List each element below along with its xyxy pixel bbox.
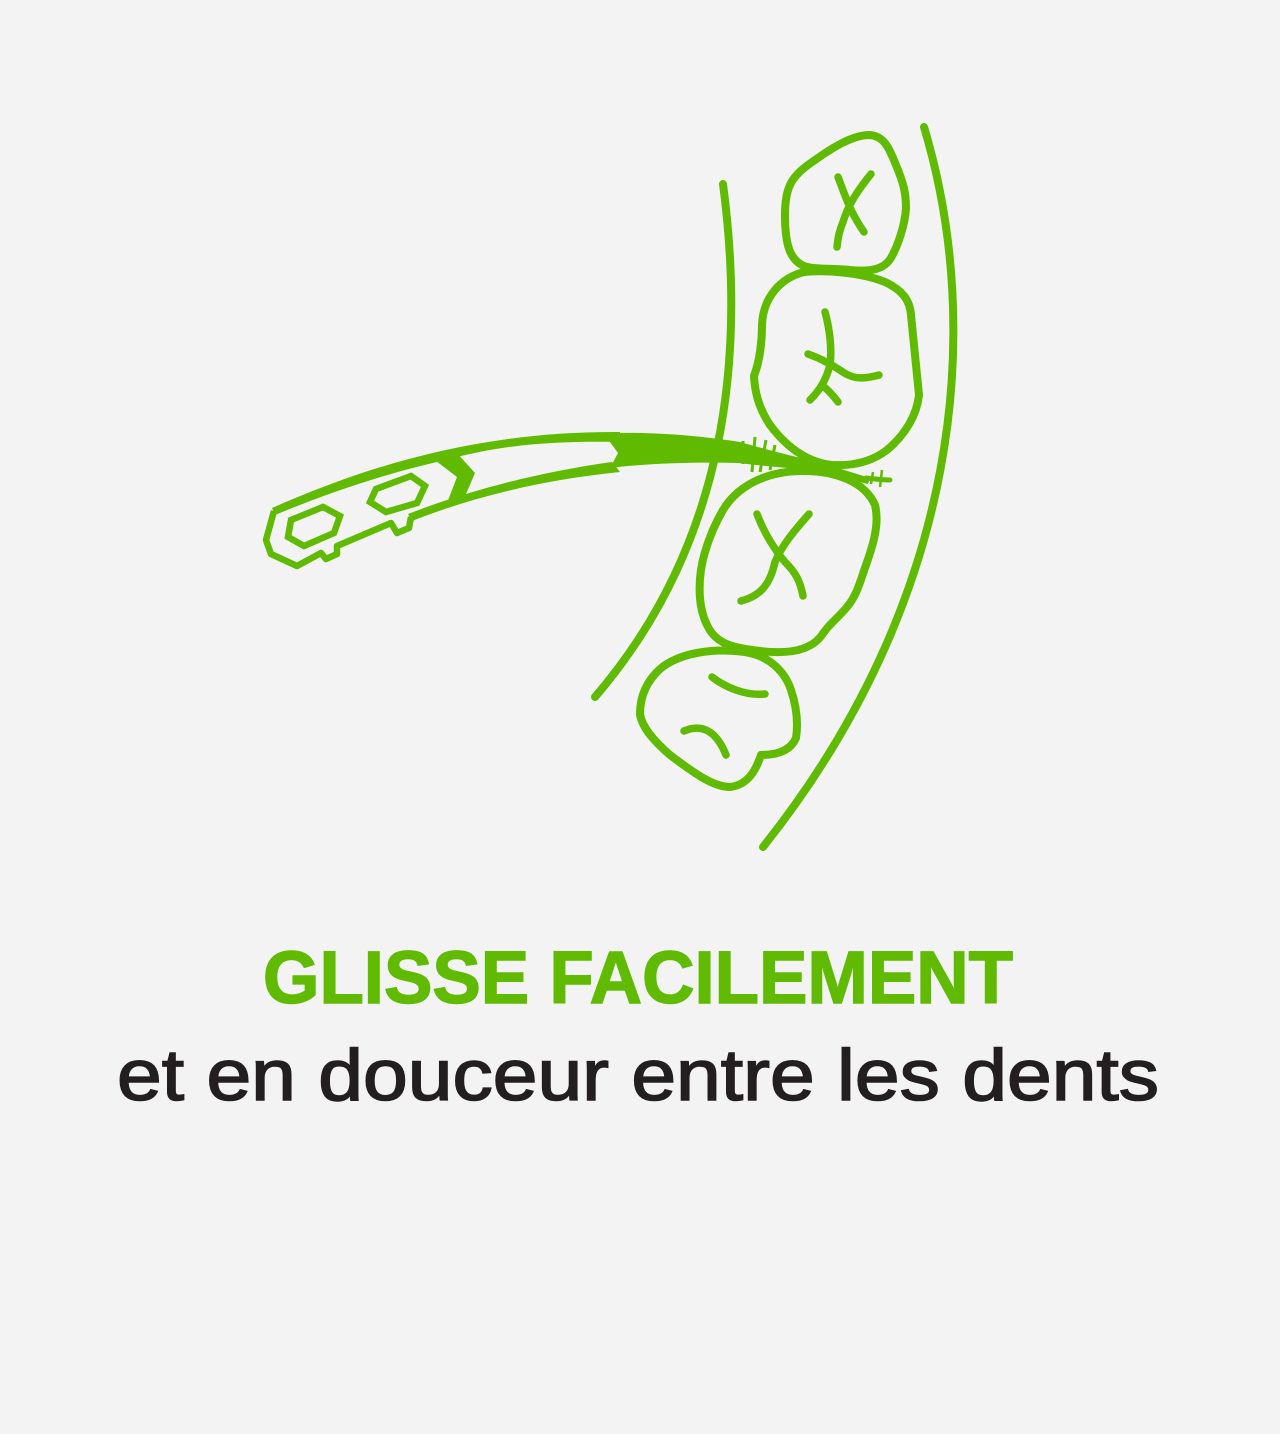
brush tip xyxy=(866,478,890,480)
brush handle end outline xyxy=(266,511,411,566)
handle hole 1 xyxy=(288,507,340,546)
handle bottom edge xyxy=(408,462,620,521)
tooth 1 xyxy=(785,135,906,271)
handle hole 2 xyxy=(370,476,425,512)
subheading: et en douceur entre les dents xyxy=(117,1036,1159,1116)
interdental brush xyxy=(266,432,890,566)
tooth 4 xyxy=(640,651,797,787)
bristles left xyxy=(743,437,775,472)
icon: teeth and interdental brush xyxy=(266,127,953,847)
tooth 3 xyxy=(700,471,877,652)
outer gum line xyxy=(763,127,953,847)
handle band xyxy=(436,452,475,503)
bristles right xyxy=(871,470,882,487)
brush neck xyxy=(610,433,870,484)
handle top edge xyxy=(272,432,620,515)
heading: GLISSE FACILEMENT xyxy=(263,936,1013,1019)
tooth 2 xyxy=(754,271,919,465)
inner gum line xyxy=(595,184,731,697)
